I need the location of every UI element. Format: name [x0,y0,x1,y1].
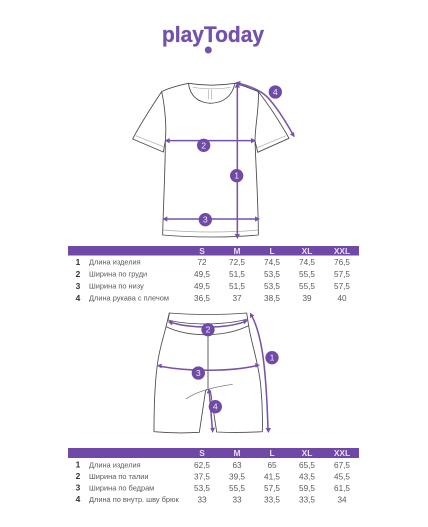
table 1 rows [76,257,350,303]
table 1 rows: 57,5 [334,270,350,279]
arrow 4: 4 [213,402,218,412]
arrow 3 [162,213,260,226]
table 2 rows: 37,5 [194,472,210,482]
table 2 rows: 63 [232,461,242,470]
table 2 rows: 57,5 [264,484,280,493]
table 1 rows: 38,5 [264,294,280,303]
arrow 4: 4 [273,87,278,97]
table 2 header: M [234,448,241,458]
table 2 rows: Ширина по талии [89,472,149,481]
table 1 header: M [234,246,241,256]
table 2 rows: 33,5 [299,496,315,504]
shorts diagram [154,313,279,433]
table 1 rows: Ширина по низу [89,282,144,290]
table 1 rows: 55,5 [299,270,315,279]
table 1 rows: 37 [232,294,242,303]
arrow 3: 3 [203,215,208,225]
table 2 rows: 67,5 [334,461,350,470]
table 1 header: XL [302,246,312,256]
table 1 [68,246,359,303]
arrow 2 [165,138,256,152]
table 1 rows: 1 [76,257,81,267]
table 2 rows: 45,5 [334,472,350,482]
arrow 3: 3 [196,368,201,378]
arrow 1: 1 [234,171,239,181]
table 1 rows: 74,5 [264,258,280,267]
table 2 rows: 41,5 [264,472,280,482]
table 2 rows: 33 [232,496,242,504]
table 2 rows: 33 [197,496,207,504]
table 1 rows: Длина изделия [89,258,141,266]
table 1 rows: 4 [76,293,81,303]
table 2 rows: 39,5 [229,472,245,482]
table 1 header: L [269,246,275,256]
table 1 rows: 49,5 [194,270,210,279]
table 1 rows: 2 [76,269,81,279]
arrow 2: 2 [201,140,206,150]
table 1 rows: 40 [337,294,347,303]
t-shirt outline [133,83,289,237]
table 1 rows: 49,5 [194,282,210,291]
arrow 4 [235,81,295,137]
table 2 rows: 53,5 [194,484,210,493]
table 1 rows: 39 [302,294,312,303]
table 1 rows: 72,5 [229,258,245,267]
table 2 rows: 62,5 [194,461,210,470]
table 1 header: S [199,246,205,256]
table 2 rows: 4 [76,494,81,504]
table 1 header [68,246,359,256]
table 2 rows: 65,5 [299,461,315,470]
table 2 rows: Длина по внутр. шву брюк [89,495,179,504]
table 2 rows: 59,5 [299,484,315,493]
t-shirt diagram [133,81,295,239]
table 2 header: S [199,448,205,458]
logo: playToday [162,22,265,47]
table 1 rows: 3 [76,281,81,291]
table 2 rows: 2 [76,471,81,481]
table 1 rows: 53,5 [264,270,280,279]
arrow 1: 1 [270,353,275,363]
shorts outline [154,313,262,433]
table 2 rows: Длина изделия [89,460,141,470]
table 1 rows: Длина рукава с плечом [89,294,169,302]
table 2 rows: 61,5 [334,484,350,493]
table 1 rows: 36,5 [194,294,210,303]
table 1 rows: 74,5 [299,258,315,267]
table 2 rows [76,460,350,504]
table 2 rows: 3 [76,482,81,492]
table 2 header: XL [302,448,312,458]
table 2 [68,448,359,504]
table 2 header [68,448,359,458]
table 1 header: XXL [334,246,350,256]
arrow 1 [230,83,243,239]
table 1 rows: 57,5 [334,282,350,291]
table 1 rows: 51,5 [229,282,245,291]
table 2 rows: Ширина по бедрам [89,484,154,492]
table 1 rows: 72 [197,258,207,267]
table 2 rows: 1 [76,460,81,470]
table 2 rows: 65 [267,461,277,470]
table 2 rows: 33,5 [264,496,280,504]
table 1 rows: 53,5 [264,282,280,291]
table 2 header: XXL [334,448,350,458]
arrow 2: 2 [206,325,211,335]
table 2 rows: 55,5 [229,484,245,493]
table 2 header: L [269,448,275,458]
table 2 rows: 43,5 [299,472,315,482]
table 1 rows: 51,5 [229,270,245,279]
table 2 rows: 34 [337,496,347,504]
table 1 rows: Ширина по груди [89,270,147,278]
table 1 rows: 55,5 [299,282,315,291]
table 1 rows: 76,5 [334,258,350,267]
